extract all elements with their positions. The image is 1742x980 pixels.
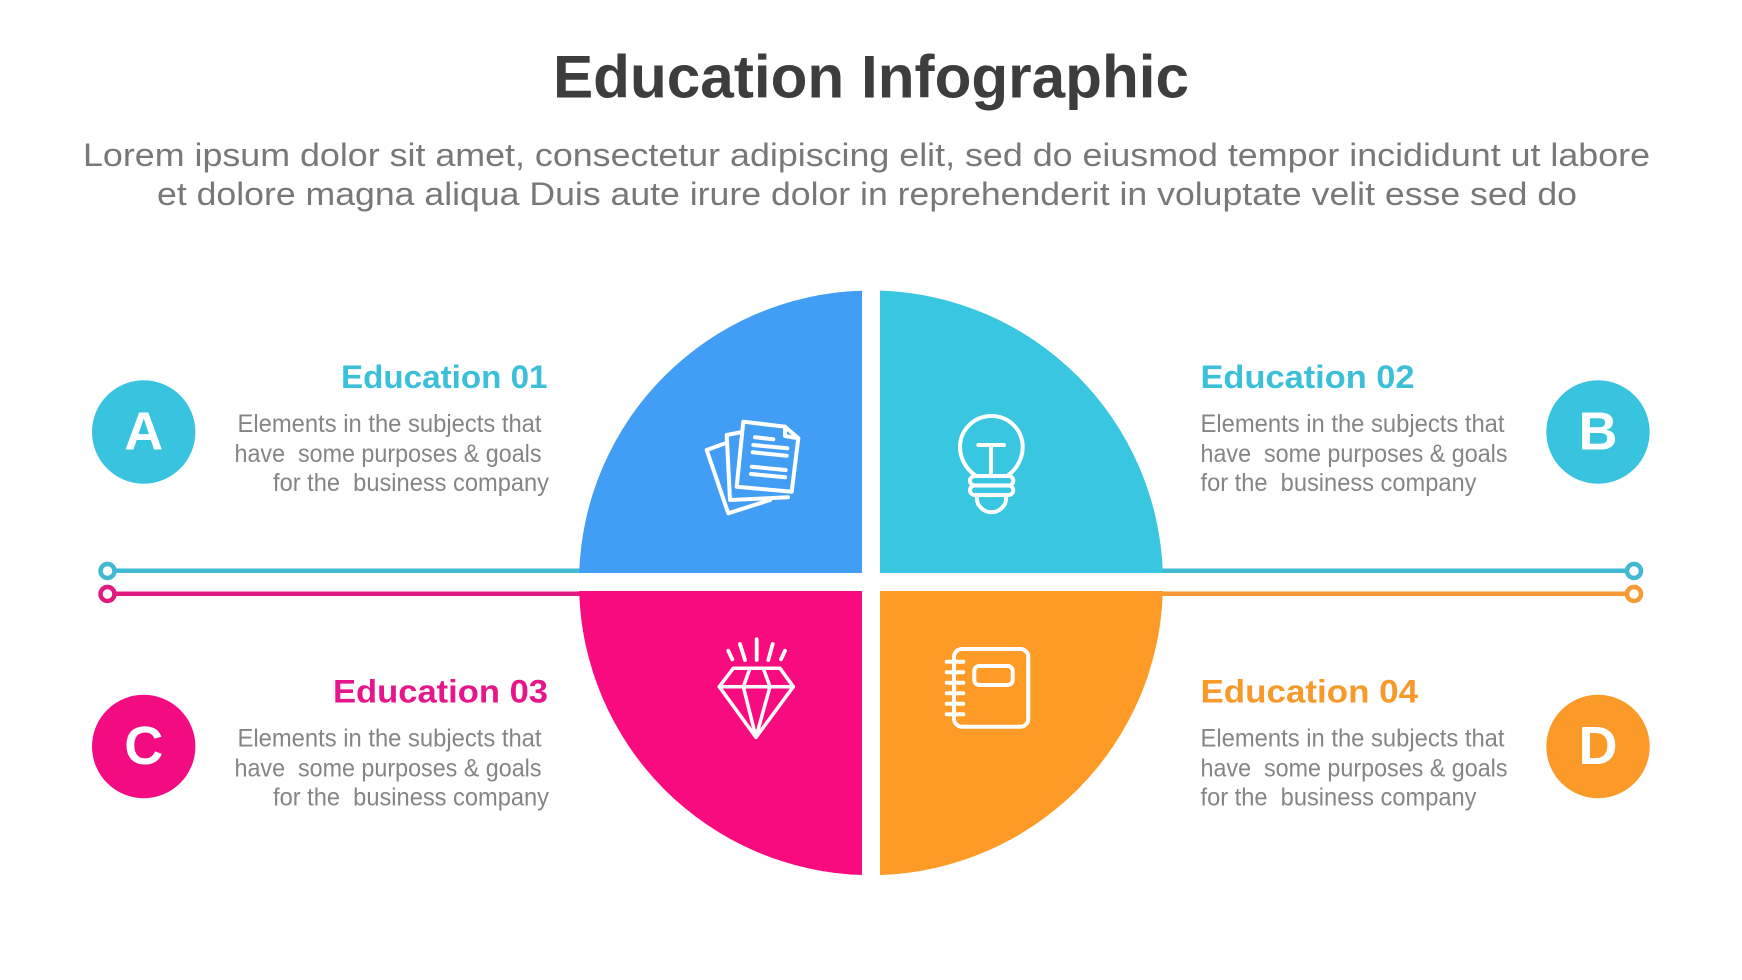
quadrant: teal with lightbulb icon [880, 291, 1163, 573]
panel: Education 03 [92, 674, 549, 812]
heading: Education 04: Education 04 [1200, 674, 1418, 710]
body text: for the business company [273, 784, 549, 812]
icon: documents [707, 422, 798, 513]
body text [1200, 410, 1508, 497]
body text: for the business company [273, 469, 549, 497]
subtitle: Lorem ipsum dolor sit amet, consectetur adipiscing elit, sed do eiusmod tempor incididunt ut labore [83, 137, 1650, 173]
quadrant: orange with notebook icon [880, 591, 1163, 875]
subtitle: et dolore magna aliqua Duis aute irure dolor in reprehenderit in voluptate velit esse sed do [157, 176, 1577, 212]
body text: for the business company [1200, 469, 1477, 497]
title: Education Infographic [553, 44, 1189, 110]
heading: Education 03: Education 03 [333, 674, 548, 710]
badge: B [1546, 380, 1650, 484]
connector line: teal left [100, 564, 580, 578]
heading: Education 02: Education 02 [1200, 359, 1414, 395]
subtitle [83, 137, 1650, 212]
badge: C: C [124, 716, 163, 776]
quadrant: pink with diamond icon [579, 591, 862, 875]
body text: have some purposes & goals [1200, 440, 1508, 468]
heading: Education 01: Education 01 [341, 359, 548, 395]
panel: Education 01 [92, 359, 549, 497]
icon: diamond [719, 639, 793, 737]
badge: A: A [124, 402, 163, 462]
quadrant: blue with documents icon [579, 291, 862, 573]
icon: lightbulb [960, 416, 1023, 512]
badge: C [92, 695, 195, 798]
body text [1200, 724, 1508, 812]
body text: Elements in the subjects that [238, 410, 542, 438]
connector line: teal right [1162, 564, 1641, 578]
panel: Education 02 [1200, 359, 1650, 497]
badge: A [92, 380, 195, 484]
icon: notebook [947, 649, 1028, 727]
badge: D [1546, 695, 1650, 798]
body text: have some purposes & goals [234, 440, 542, 468]
connector line: orange right [1162, 587, 1641, 601]
body text [234, 410, 549, 497]
body text [234, 724, 549, 812]
body text: have some purposes & goals [234, 754, 542, 782]
badge: D: D [1578, 716, 1618, 776]
connector line: pink left [100, 587, 580, 601]
badge: B: B [1578, 402, 1618, 462]
body text: for the business company [1200, 784, 1477, 812]
panel: Education 04 [1200, 674, 1650, 812]
body text: have some purposes & goals [1200, 754, 1508, 782]
body text: Elements in the subjects that [1200, 410, 1505, 438]
body text: Elements in the subjects that [238, 724, 542, 752]
body text: Elements in the subjects that [1200, 724, 1505, 752]
